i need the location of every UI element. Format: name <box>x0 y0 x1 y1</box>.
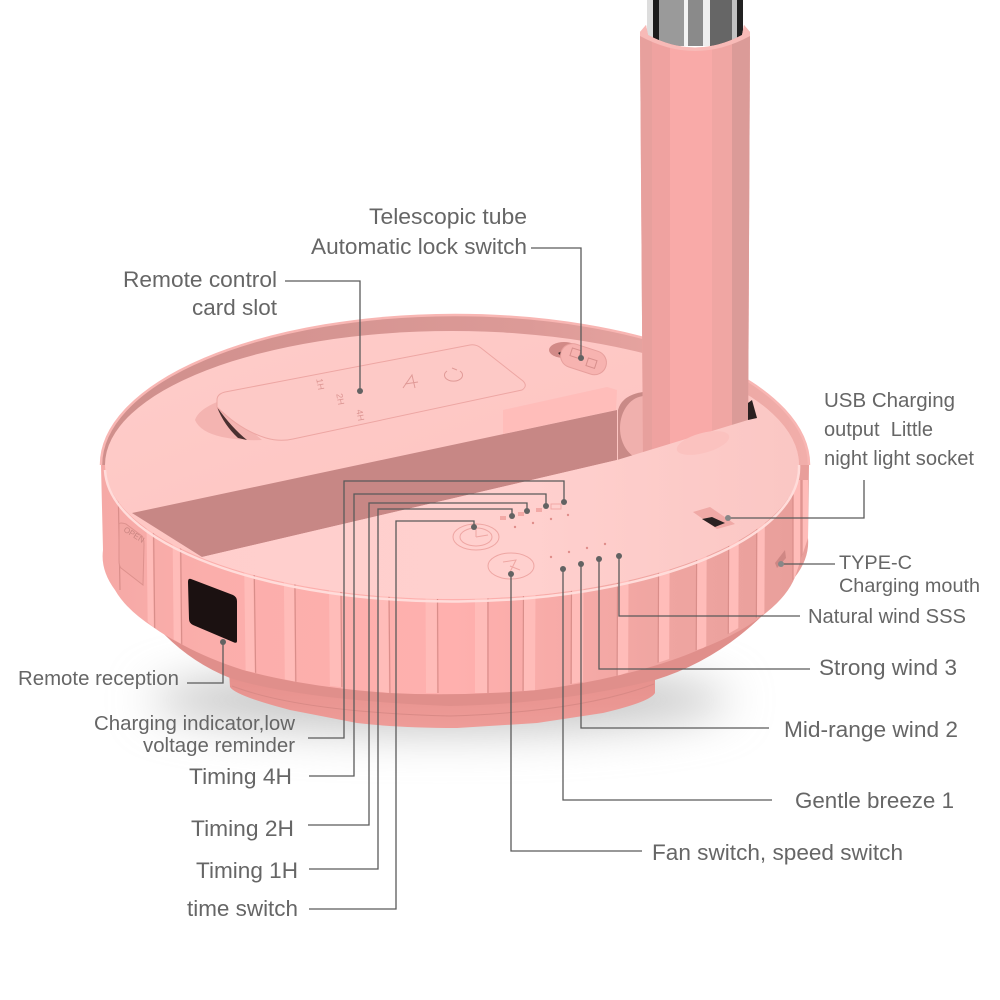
remote reception window <box>188 579 237 643</box>
label: fan switch: Fan switch, speed switch <box>652 840 903 865</box>
label: remote reception: Remote reception <box>18 668 179 690</box>
label: USB output: night light socket <box>824 447 974 470</box>
upper tier surface <box>105 331 799 599</box>
shadowed wall between tiers <box>132 410 617 557</box>
label: telescopic tube lock: Automatic lock switch <box>311 234 527 259</box>
label: telescopic tube lock <box>311 204 527 259</box>
wall top bevel <box>503 387 617 434</box>
tube base bump <box>674 426 732 460</box>
side band with ribs <box>101 465 809 700</box>
remote control card slot: 4H <box>354 409 366 422</box>
label: natural wind: Natural wind SSS <box>808 605 966 628</box>
label: USB output: output Little <box>824 418 933 441</box>
label: remote card slot: card slot <box>192 295 277 320</box>
slot behind tube <box>748 400 757 420</box>
USB socket <box>693 507 735 529</box>
remote control card slot <box>195 345 525 440</box>
label: open card compartment: OPEN <box>122 525 146 545</box>
label: timing 1H: Timing 1H <box>196 858 298 883</box>
remote control card slot: 1H <box>314 378 326 391</box>
label: timing 2H: Timing 2H <box>191 816 294 841</box>
lower tier surface <box>200 399 791 599</box>
label: USB output: USB Charging <box>824 389 955 412</box>
label: Type-C: TYPE-C <box>839 552 912 574</box>
ground shadow <box>150 668 730 732</box>
label: remote card slot: Remote control <box>123 267 277 292</box>
underside lip <box>160 608 770 706</box>
label: gentle breeze: Gentle breeze 1 <box>795 788 954 813</box>
label: USB output <box>824 389 974 470</box>
chrome telescopic pole <box>647 0 743 46</box>
telescopic lock switch <box>549 340 610 378</box>
label: charging indicator: Charging indicator,low <box>94 713 296 735</box>
top rim <box>101 315 809 465</box>
pink tube <box>640 25 750 460</box>
label: Type-C <box>839 552 980 597</box>
timer button <box>453 524 499 550</box>
tube joint <box>618 392 670 460</box>
product: desk fan base <box>95 0 815 728</box>
leader lines <box>187 248 864 909</box>
label: Type-C: Charging mouth <box>839 575 980 597</box>
label: remote card slot <box>123 267 277 320</box>
label: open card compartment <box>119 523 146 585</box>
remote control card slot: 2H <box>334 393 346 406</box>
fan button <box>488 553 534 579</box>
rim front highlight <box>105 465 799 601</box>
label: time switch: time switch <box>187 896 298 921</box>
label: timing 4H: Timing 4H <box>189 764 292 789</box>
label: strong wind: Strong wind 3 <box>819 655 957 680</box>
base foot <box>229 672 655 728</box>
label: charging indicator <box>94 713 296 757</box>
indicator dots and tiny labels <box>500 504 606 558</box>
label: mid-range wind: Mid-range wind 2 <box>784 717 958 742</box>
Type-C port <box>775 550 786 568</box>
label: telescopic tube lock: Telescopic tube <box>369 204 527 229</box>
label: charging indicator: voltage reminder <box>143 735 295 757</box>
